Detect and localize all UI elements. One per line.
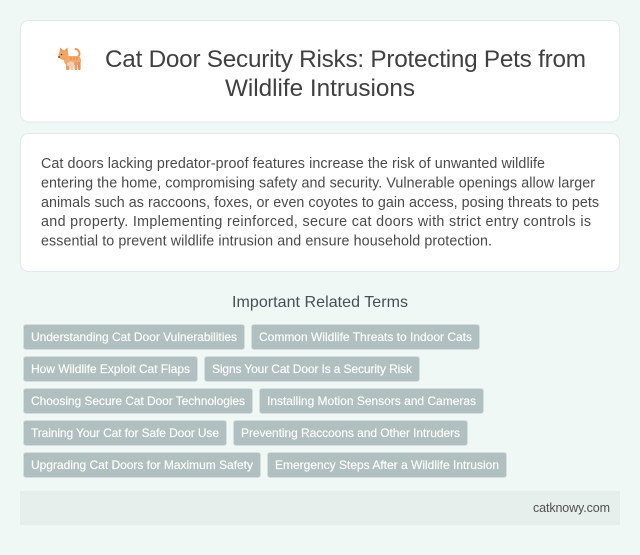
tag: secure technologies (24, 388, 252, 414)
tag: wildlife threats: Common Wildlife Threats to Indoor Cats (259, 330, 472, 344)
tag: understanding vulnerabilities (24, 324, 244, 350)
tag: upgrading (24, 452, 260, 478)
tag: security risk signs: Signs Your Cat Door Is a Security Risk (212, 362, 413, 376)
tag: understanding vulnerabilities: Understanding Cat Door Vulnerabilities (31, 330, 237, 344)
title text: Wildlife Intrusions (225, 75, 415, 102)
tag: upgrading: Upgrading Cat Doors for Maximum Safety (31, 458, 253, 472)
tag: emergency steps (268, 452, 506, 478)
tag: exploit flaps: How Wildlife Exploit Cat Flaps (31, 362, 190, 376)
tag: exploit flaps (24, 356, 198, 382)
tag: training (24, 420, 226, 446)
tag: emergency steps: Emergency Steps After a Wildlife Intrusion (275, 458, 499, 472)
title text (105, 46, 586, 102)
heading: related terms: Important Related Terms (232, 294, 408, 311)
tag: wildlife threats (252, 324, 480, 350)
tag: motion sensors (260, 388, 484, 414)
description text: essential to prevent wildlife intrusion and ensure household protection. (41, 234, 492, 250)
tag: preventing raccoons: Preventing Raccoons and Other Intruders (241, 426, 460, 440)
title text: Cat Door Security Risks: Protecting Pets from (105, 46, 586, 73)
icon: cat (58, 48, 81, 70)
description text (41, 156, 599, 250)
panel: title card (20, 20, 620, 122)
description text: animals such as raccoons, foxes, or even coyotes to gain access, posing threats to pets (41, 195, 599, 211)
tag: training: Training Your Cat for Safe Door Use (31, 426, 219, 440)
panel: description card (20, 134, 620, 272)
tag: secure technologies: Choosing Secure Cat Door Technologies (31, 394, 245, 408)
tag: preventing raccoons (234, 420, 468, 446)
description text: Cat doors lacking predator-proof features increase the risk of unwanted wildlife (41, 156, 545, 172)
tag: motion sensors: Installing Motion Sensors and Cameras (267, 394, 476, 408)
footer (20, 491, 620, 525)
footer: source: catknowy.com (533, 501, 610, 515)
tags: related terms (24, 324, 506, 478)
tag: security risk signs (204, 356, 420, 382)
description text: entering the home, compromising safety and security. Vulnerable openings allow larger (41, 175, 595, 191)
description text: and property. Implementing reinforced, secure cat doors with strict entry controls is (41, 214, 591, 230)
